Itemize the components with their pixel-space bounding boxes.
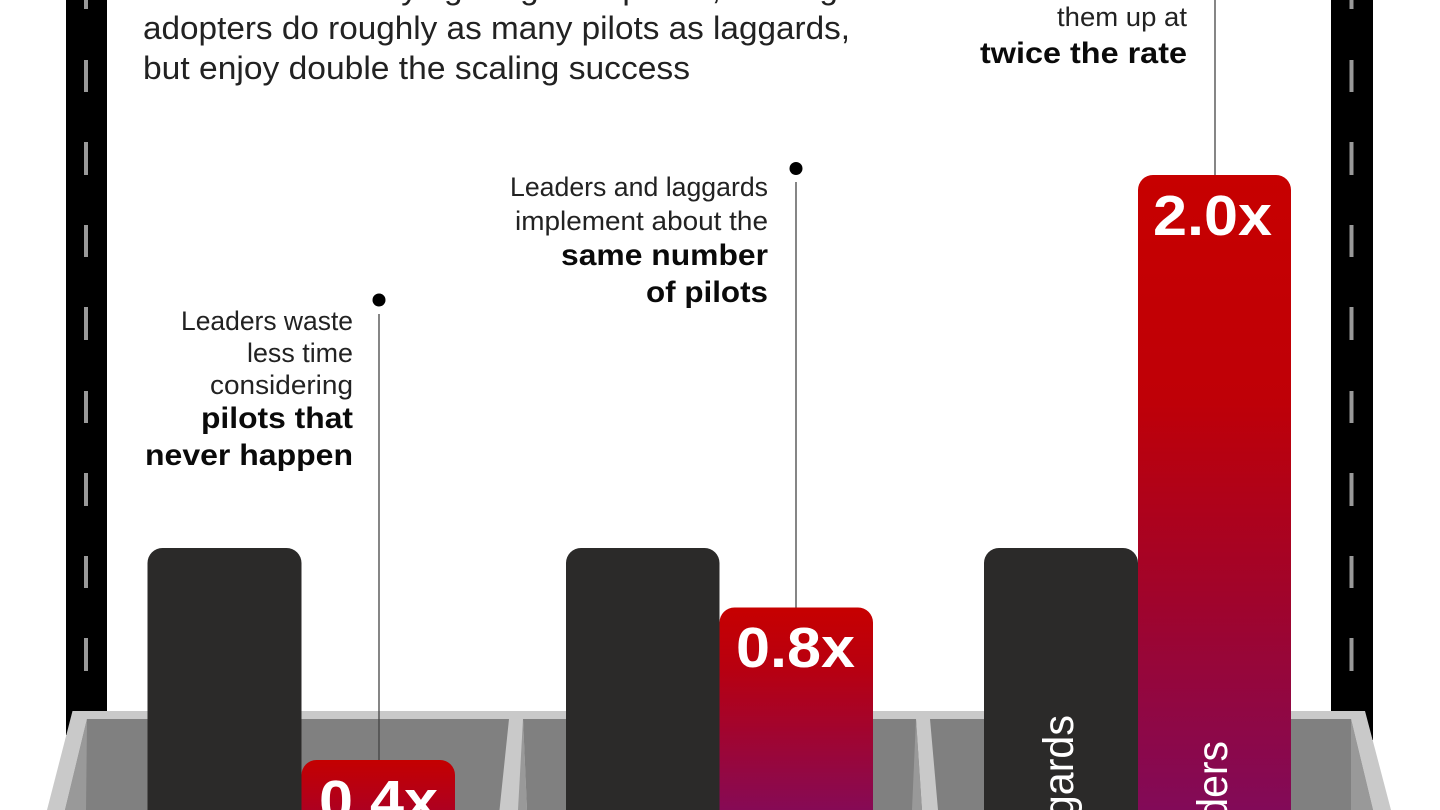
group 2 callout text xyxy=(510,172,769,309)
intro text xyxy=(143,0,850,86)
group 2 leaders bar with value xyxy=(720,608,873,810)
group 2 leaders bar with value: 0.8x xyxy=(736,616,855,680)
group 2 callout text: implement about the xyxy=(515,206,768,236)
group 3 callout text: them up at xyxy=(1057,2,1188,32)
group 3 callout leader line xyxy=(1214,0,1216,175)
group 2 callout text: same number xyxy=(561,239,769,272)
group 1 leaders bar with value xyxy=(302,760,455,810)
group 1 callout text: Leaders waste xyxy=(181,306,353,336)
group 1 callout text: pilots that xyxy=(201,402,353,435)
group 2 callout leader line xyxy=(790,162,802,608)
group 1 callout leader line xyxy=(372,294,386,760)
group 1 callout text: never happen xyxy=(145,439,353,472)
group 2 callout text: Leaders and laggards xyxy=(510,172,768,202)
bin with three compartments xyxy=(47,711,1391,810)
intro text: adopters do roughly as many pilots as laggards, xyxy=(143,10,850,46)
group 3 callout text: twice the rate xyxy=(980,37,1187,70)
group 3 callout text xyxy=(980,2,1188,70)
group 1 callout text: considering xyxy=(210,370,353,400)
group 3 leaders bar with value and label xyxy=(1138,175,1291,810)
intro text: but enjoy double the scaling success xyxy=(143,50,690,86)
group 1 callout text xyxy=(145,306,353,472)
group 2 callout text: of pilots xyxy=(646,276,768,309)
right road xyxy=(1331,0,1373,740)
group 1 callout text: less time xyxy=(247,338,353,368)
group 3 leaders bar with value and label: 2.0x xyxy=(1153,184,1272,248)
group 2 laggards bar xyxy=(566,548,720,810)
group 3 laggards bar with label xyxy=(984,548,1138,810)
left road xyxy=(66,0,107,735)
group 1 laggards bar xyxy=(148,548,302,810)
